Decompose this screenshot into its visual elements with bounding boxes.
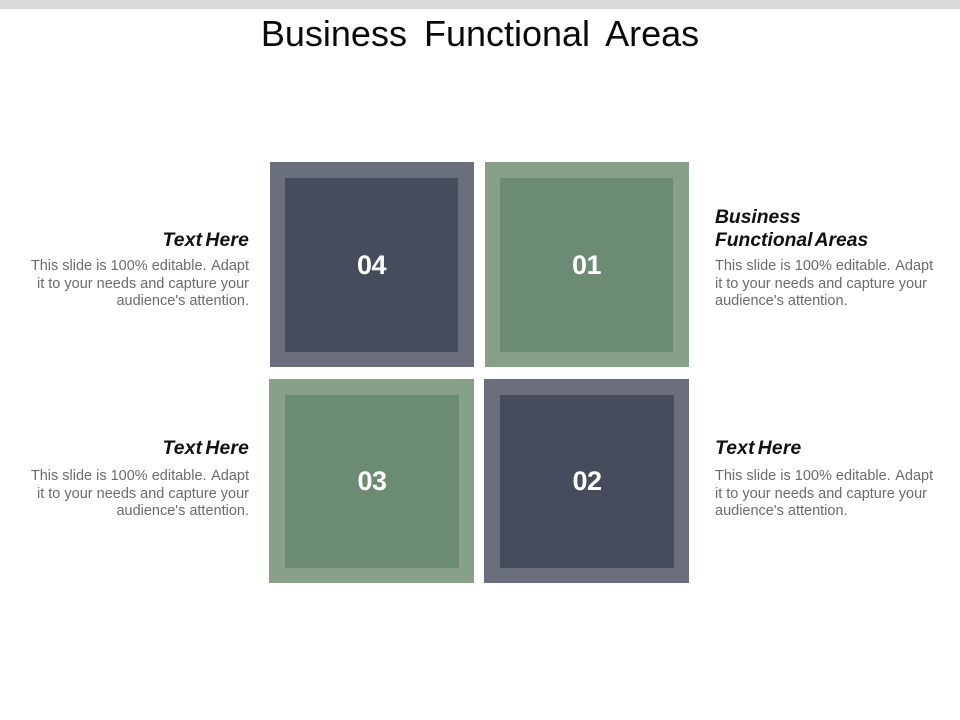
text block: bottom left: it to your needs and capture your	[37, 486, 249, 502]
panel: square 04: 04	[357, 250, 386, 280]
text block: top right: audience's attention.	[715, 293, 848, 309]
panel: square 03	[269, 379, 474, 583]
text block: bottom right: Text Here	[715, 438, 801, 459]
text block: bottom left: Text Here	[163, 438, 249, 459]
text block: top right: it to your needs and capture your	[715, 276, 927, 292]
text block: top right: Functional Areas	[715, 230, 868, 251]
text block: top left	[31, 230, 249, 309]
text block: top right: This slide is 100% editable. Adapt	[715, 258, 933, 274]
text block: top left: This slide is 100% editable. Adapt	[31, 258, 249, 274]
text block: bottom right: This slide is 100% editable. Adapt	[715, 468, 933, 484]
text block: top left: audience's attention.	[116, 293, 249, 309]
text block: bottom right: it to your needs and capture your	[715, 486, 927, 502]
text block: top right	[715, 207, 934, 309]
panel: square 03: 03	[357, 466, 387, 496]
text block: bottom left: audience's attention.	[116, 503, 249, 519]
text block: bottom left	[31, 438, 249, 519]
text block: top left: Text Here	[163, 230, 249, 251]
text block: bottom left: This slide is 100% editable. Adapt	[31, 468, 249, 484]
text block: top left: it to your needs and capture your	[37, 276, 249, 292]
panel: square 04	[270, 162, 474, 367]
text block: bottom right	[715, 438, 934, 519]
text block: bottom right: audience's attention.	[715, 503, 848, 519]
panel: square 01: 01	[572, 250, 601, 280]
panel: square 02: 02	[572, 466, 602, 496]
title: Business Functional Areas	[261, 13, 699, 54]
panel: square 02	[484, 379, 689, 583]
text block: top right: Business	[715, 207, 801, 228]
panel: square 01	[485, 162, 689, 367]
